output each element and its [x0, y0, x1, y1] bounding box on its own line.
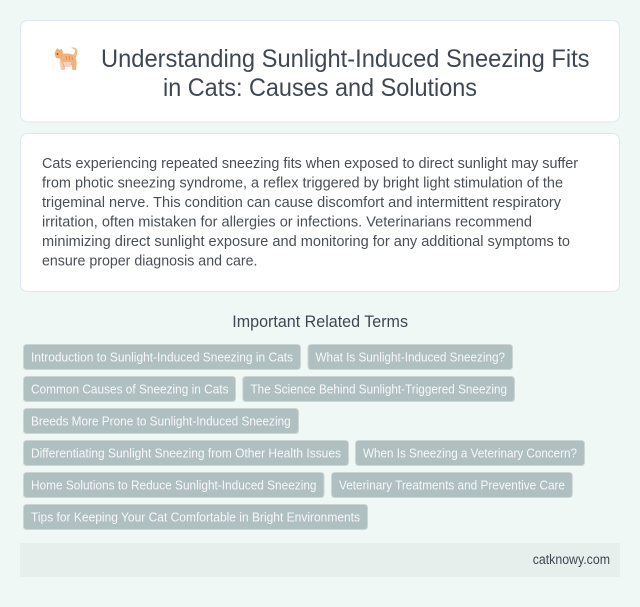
chip: differentiating: Differentiating Sunlight Sneezing from Other Health Issues [31, 445, 341, 460]
chip: veterinary treatments [332, 472, 572, 498]
chip: breeds: Breeds More Prone to Sunlight-Induced Sneezing [31, 413, 291, 428]
icon: orange cat [54, 47, 78, 70]
description text: Cats experiencing repeated sneezing fits when exposed to direct sunlight may suffer [42, 156, 578, 172]
chip: home solutions [24, 472, 324, 498]
chip: tips: Tips for Keeping Your Cat Comfortable in Bright Environments [31, 509, 360, 524]
footer [20, 543, 620, 577]
chip: veterinary concern: When Is Sneezing a Veterinary Concern? [363, 445, 577, 460]
chip: common causes: Common Causes of Sneezing in Cats [31, 381, 228, 396]
description text: minimizing direct sunlight exposure and monitoring for any additional symptoms to [42, 234, 570, 250]
description text: irritation, often mistaken for allergies or infections. Veterinarians recommend [42, 214, 532, 230]
chip: tips [24, 504, 368, 530]
description text: from photic sneezing syndrome, a reflex triggered by bright light stimulation of the [42, 176, 563, 192]
description text: trigeminal nerve. This condition can cause discomfort and intermittent respiratory [42, 195, 562, 211]
panel: description card [20, 134, 620, 292]
footer: catknowy.com [533, 552, 610, 567]
chip: differentiating [24, 440, 348, 466]
chip: introduction [24, 344, 300, 370]
chip: home solutions: Home Solutions to Reduce Sunlight-Induced Sneezing [31, 477, 316, 492]
chip: breeds [24, 408, 298, 434]
related terms chips [24, 344, 584, 530]
description text [42, 156, 578, 270]
chip: what is [308, 344, 512, 370]
panel: title card [20, 20, 620, 122]
title: in Cats: Causes and Solutions [163, 74, 477, 102]
title [101, 45, 590, 102]
chip: introduction: Introduction to Sunlight-Induced Sneezing in Cats [31, 349, 293, 364]
chip: the science: The Science Behind Sunlight-Triggered Sneezing [250, 381, 507, 396]
heading: important related terms: Important Related Terms [232, 313, 408, 331]
chip: what is: What Is Sunlight-Induced Sneezing? [316, 349, 505, 364]
chip: the science [243, 376, 515, 402]
description text: ensure proper diagnosis and care. [42, 254, 258, 270]
title: Understanding Sunlight-Induced Sneezing Fits [101, 45, 590, 73]
chip: veterinary treatments: Veterinary Treatments and Preventive Care [339, 477, 565, 492]
chip: veterinary concern [356, 440, 584, 466]
chip: common causes [24, 376, 236, 402]
